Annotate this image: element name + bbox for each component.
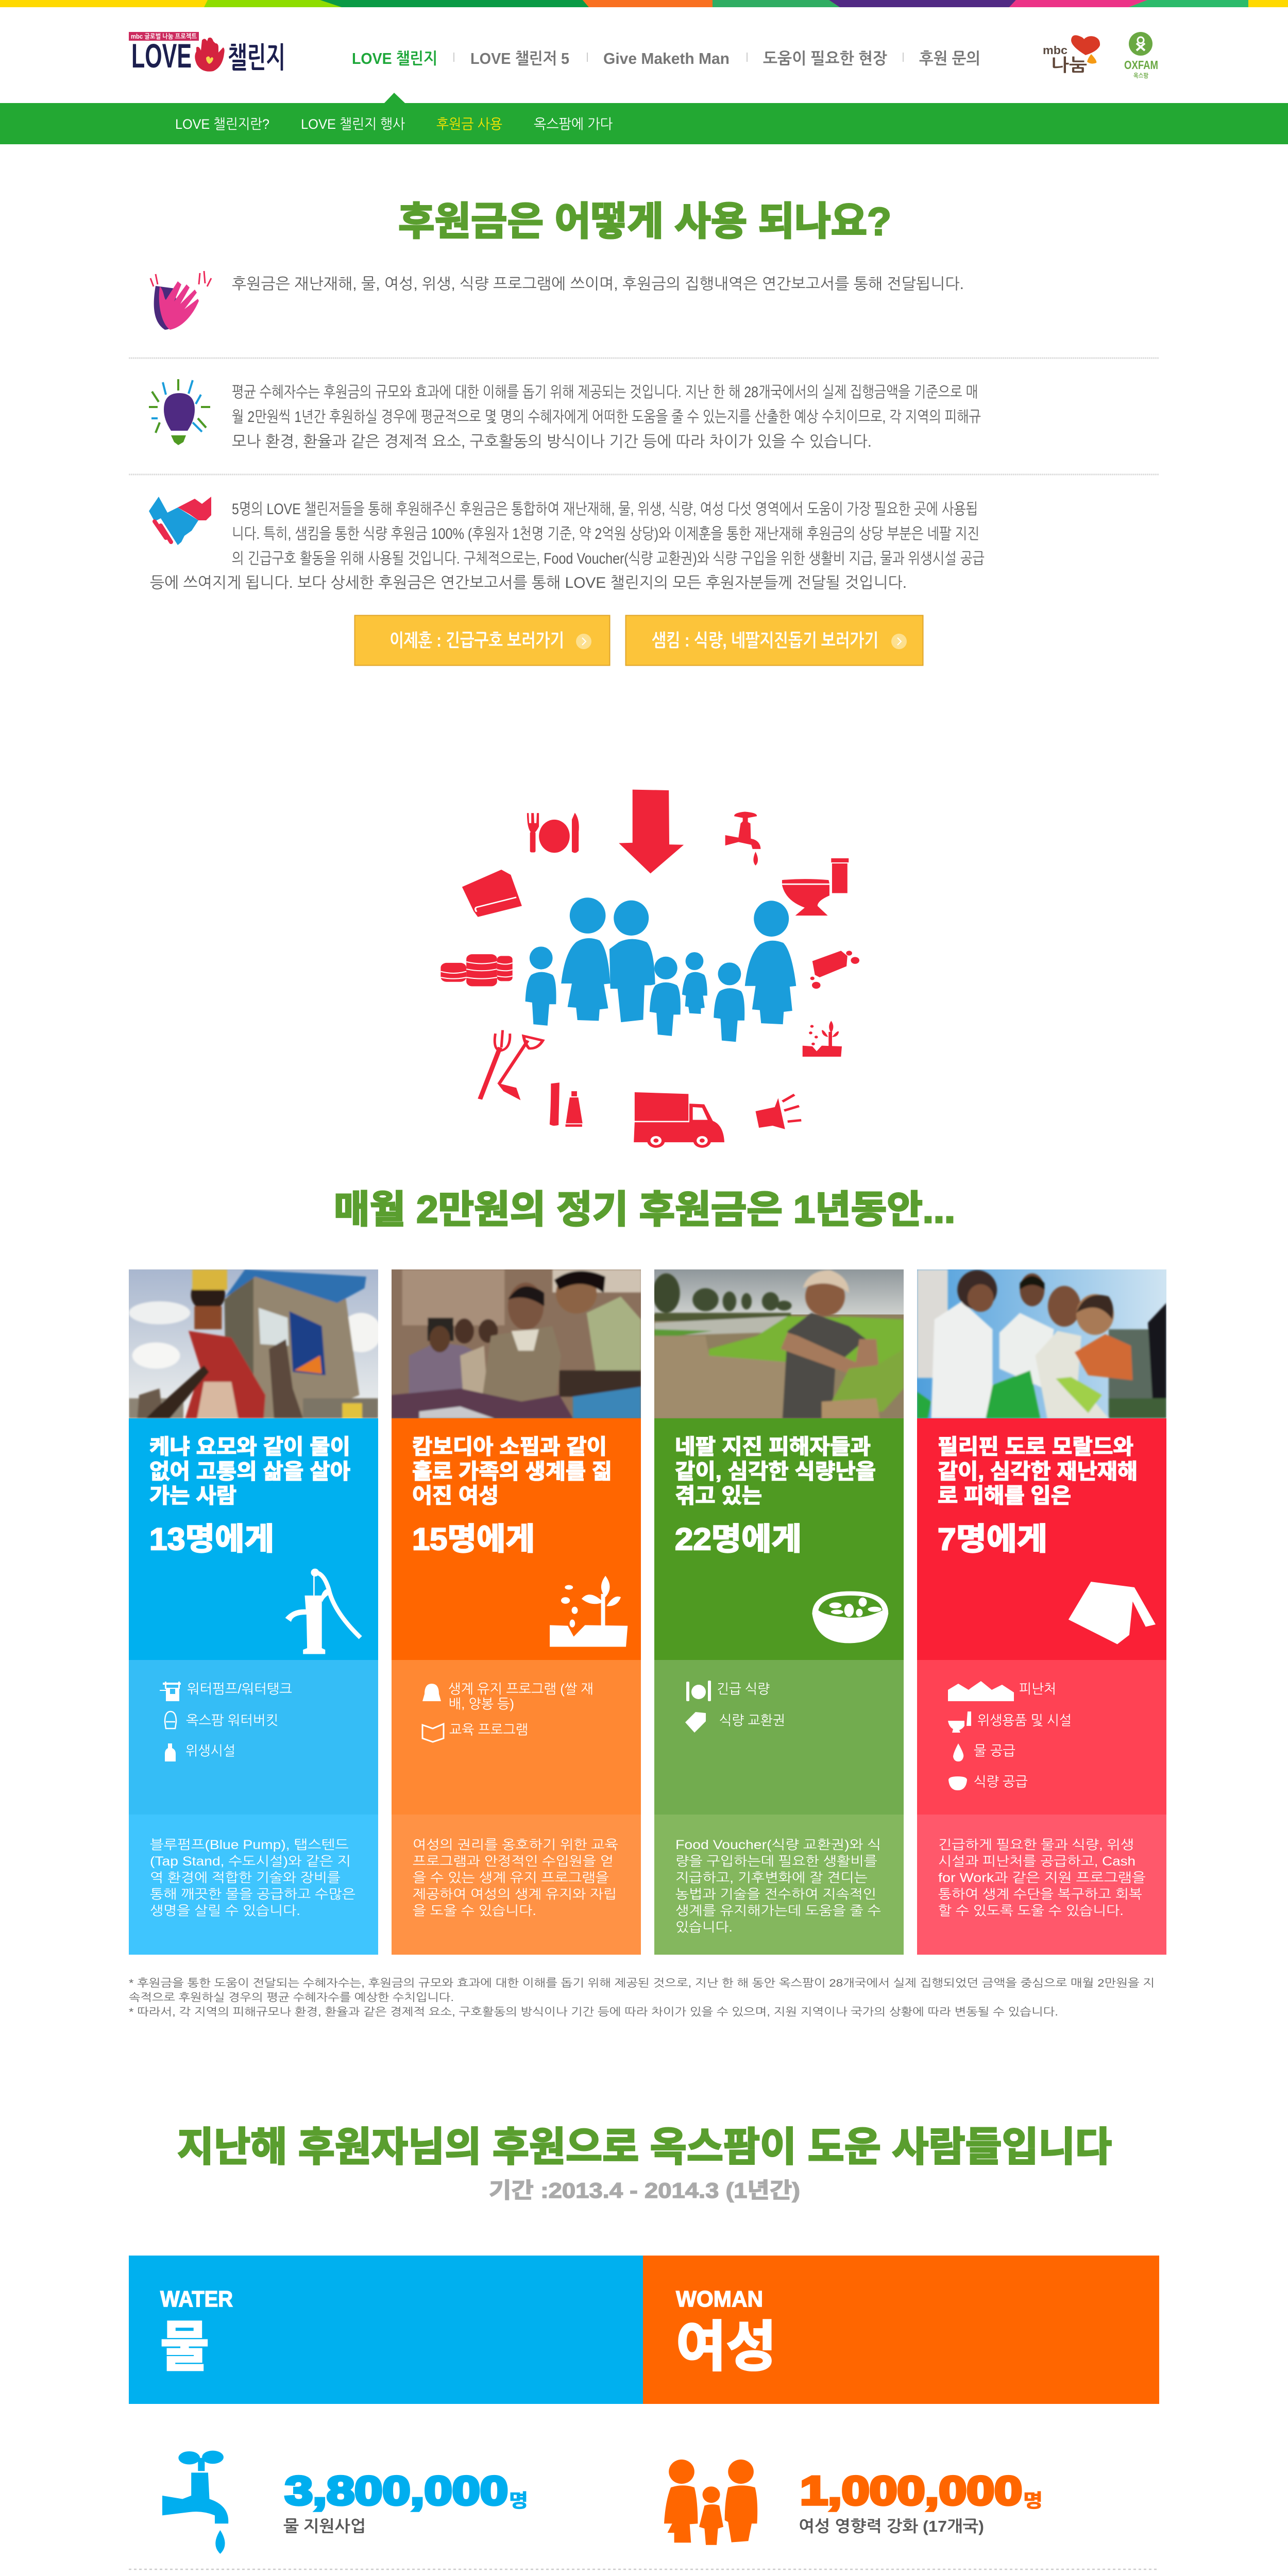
- card heading: 네팔 지진 피해자들과: [675, 1435, 871, 1459]
- beneficiary count: 13명에게: [149, 1522, 274, 1556]
- card 2: Cambodia women: [392, 1269, 641, 1955]
- beneficiary count: 7명에게: [938, 1522, 1047, 1556]
- logo: Oxfam: OXFAM: [1124, 58, 1158, 72]
- description: [150, 1838, 355, 1918]
- card 3: Nepal food: [653, 1269, 904, 1955]
- description: 있습니다.: [675, 1920, 733, 1935]
- card heading: [675, 1435, 876, 1507]
- photo: women group in Cambodia: [392, 1269, 641, 1418]
- card heading: 없어 고통의 삶을 살아: [149, 1460, 350, 1483]
- card heading: 가는 사람: [149, 1484, 236, 1507]
- stat: women's empowerment: 명: [1023, 2490, 1043, 2511]
- logo: LOVE challenge: 챌린지: [228, 41, 285, 74]
- sub navigation bar: LOVE 챌린지란?: [175, 116, 269, 132]
- list: food programmes: [685, 1681, 785, 1733]
- list: livelihood programmes: [422, 1681, 594, 1742]
- photo: water kiosk in Kenya: [129, 1269, 378, 1418]
- list: livelihood programmes: 배, 양봉 등): [449, 1696, 514, 1711]
- main navigation: 도움이 필요한 현장: [763, 49, 887, 67]
- list: emergency programmes: 위생용품 및 시설: [977, 1713, 1072, 1728]
- card 4: Philippines disaster: [917, 1269, 1166, 1955]
- panel: water: WATER: [160, 2286, 233, 2312]
- arrow: donation down: [619, 790, 684, 873]
- main navigation: Give Maketh Man: [603, 49, 730, 67]
- heading: people helped last year: 지난해 후원자님의 후원으로 옥스팜이 도운 사람들입니다: [177, 2124, 1112, 2170]
- text block: intro line: 후원금은 재난재해, 물, 여성, 위생, 식량 프로그램에 쓰이며, 후원금의 집행내역은 연간보고서를 통해 전달됩니다.: [232, 276, 964, 293]
- logo: MBC nanum: 나눔: [1051, 56, 1087, 75]
- icon: open book: [422, 1724, 444, 1742]
- panel: woman: 여성: [676, 2317, 776, 2378]
- text block: how donations are used: 니다. 특히, 샘킴을 통한 식량 후원금 100% (후원자 1천명 기준, 약 2억원 상당)와 이제훈을 통한 재난재해 후원금의 상당 부분은 네팔 지진: [232, 526, 979, 543]
- icon: tap: [162, 2451, 228, 2554]
- description: 통해 깨끗한 물을 공급하고 수많은: [150, 1887, 355, 1902]
- icon: food bowl: [948, 1776, 967, 1790]
- description: 생명을 살릴 수 있습니다.: [150, 1904, 300, 1918]
- stat: women's empowerment: 여성 영향력 강화 (17개국): [799, 2517, 984, 2535]
- description: 프로그램과 안정적인 수입원을 얻: [413, 1854, 614, 1869]
- icon: tap: [725, 811, 760, 866]
- list: water programmes: [160, 1681, 292, 1761]
- description: 을 도울 수 있습니다.: [413, 1904, 536, 1918]
- stat: water projects: 3,800,000: [285, 2468, 508, 2513]
- card heading: [938, 1435, 1138, 1507]
- colour panels: [654, 1418, 904, 1660]
- description: 지급하고, 기후변화에 잘 견디는: [675, 1871, 868, 1885]
- icon: seedling: [803, 1021, 842, 1057]
- button: food and Nepal: [625, 615, 923, 666]
- icon: voucher tag: [685, 1712, 706, 1733]
- logo: LOVE challenge: LOVE: [131, 37, 192, 75]
- panel: woman: WOMAN: [676, 2286, 763, 2312]
- photo: relief distribution in the Philippines: [917, 1269, 1166, 1418]
- list: emergency programmes: 물 공급: [974, 1743, 1015, 1758]
- sub navigation bar: 옥스팜에 가다: [534, 116, 613, 132]
- icon: megaphone: [756, 1095, 801, 1129]
- logo: MBC nanum: mbc: [1043, 44, 1067, 57]
- logo: Oxfam: 옥스팜: [1133, 72, 1149, 79]
- period: 기간 :2013.4 - 2014.3 (1년간): [489, 2178, 800, 2202]
- icon: truck: [634, 1092, 724, 1148]
- logo: LOVE challenge: [129, 32, 285, 75]
- icon: soap: [810, 951, 859, 989]
- list: emergency programmes: [948, 1681, 1072, 1790]
- description: [675, 1838, 881, 1935]
- icon: handshake: [149, 497, 211, 545]
- description: 할 수 있도록 도울 수 있습니다.: [938, 1904, 1124, 1918]
- description: 여성의 권리를 옹호하기 위한 교육: [413, 1838, 618, 1852]
- description: Food Voucher(식량 교환권)와 식: [675, 1838, 881, 1852]
- colour panels: [392, 1418, 641, 1660]
- panel: water: [129, 2256, 643, 2404]
- icon: toilet: [948, 1711, 971, 1733]
- icon: tent: [1069, 1582, 1156, 1644]
- description: (Tap Stand, 수도시설)와 같은 지: [150, 1854, 351, 1869]
- text block: beneficiaries explanation: [232, 384, 981, 450]
- list: food programmes: 식량 교환권: [719, 1713, 785, 1728]
- icon: toilet: [782, 858, 849, 916]
- icon: sewing machine: [422, 1684, 441, 1701]
- icon: plant: [550, 1576, 628, 1647]
- card heading: 어진 여성: [412, 1484, 499, 1507]
- stat: women's empowerment: [664, 2460, 1043, 2545]
- card heading: 케냐 요모와 같이 물이: [149, 1435, 350, 1459]
- icon: family: [664, 2460, 757, 2545]
- footnotes: * 후원금을 통한 도움이 전달되는 수혜자수는, 후원금의 규모와 효과에 대한 이해를 돕기 위해 제공된 것으로, 지난 한 해 동안 옥스팜이 28개국에서 실제 집행되었던 금액을 중심으로 매월 2만원을 지: [129, 1977, 1155, 1989]
- description: 제공하여 여성의 생계 유지와 자립: [413, 1887, 617, 1902]
- icon: wallet: [462, 870, 522, 917]
- description: 블루펌프(Blue Pump), 탭스텐드: [150, 1838, 349, 1852]
- colour panels: [917, 1418, 1166, 1660]
- footnotes: [129, 1977, 1155, 2018]
- text block: how donations are used: 5명의 LOVE 챌린저들을 통해 후원해주신 후원금은 통합하여 재난재해, 물, 위생, 식량, 여성 다섯 영역에서 도움이 가장 필요한 곳에 사용됩: [232, 501, 978, 518]
- icon: bowl of rice: [812, 1591, 888, 1643]
- stat: water projects: 물 지원사업: [283, 2517, 366, 2535]
- logo: MBC nanum: [1043, 35, 1100, 75]
- card 1: Kenya water: [129, 1269, 382, 1955]
- description: [938, 1838, 1146, 1918]
- footnotes: * 따라서, 각 지역의 피해규모나 환경, 환율과 같은 경제적 요소, 구호활동의 방식이나 기간 등에 따라 차이가 있을 수 있으며, 지원 지역이나 국가의 상황에 따라 변동될 수 있습니다.: [129, 2006, 1058, 2018]
- card heading: 홀로 가족의 생계를 짊: [412, 1460, 612, 1483]
- description: 량을 구입하는데 필요한 생활비를: [675, 1854, 877, 1869]
- list: water programmes: 옥스팜 워터버킷: [186, 1713, 278, 1728]
- list: emergency programmes: 피난처: [1019, 1681, 1056, 1697]
- icon: plate and cutlery: [686, 1681, 711, 1701]
- footnotes: 속적으로 후원하실 경우의 평균 수혜자수를 예상한 수치입니다.: [129, 1992, 454, 2004]
- sub navigation bar: 후원금 사용: [436, 116, 502, 132]
- list: water programmes: 워터펌프/워터탱크: [187, 1681, 292, 1697]
- colour panels: [129, 1418, 378, 1660]
- text block: how donations are used: 의 긴급구호 활동을 위해 사용될 것입니다. 구체적으로는, Food Voucher(식량 교환권)와 식량 구입을 위한 생활비 지급, 물과 위생시설 공급: [232, 550, 985, 567]
- icon: farm tools: [480, 1030, 543, 1100]
- stat: women's empowerment: 1,000,000: [800, 2468, 1022, 2513]
- card heading: 캄보디아 소핍과 같이: [412, 1435, 607, 1459]
- photo: boy with rice seedlings: [654, 1269, 904, 1418]
- card heading: 필리핀 도로 모랄드와: [938, 1435, 1133, 1459]
- icon: water drop: [953, 1743, 963, 1761]
- text block: how donations are used: [150, 501, 985, 591]
- text block: beneficiaries explanation: 평균 수혜자수는 후원금의 규모와 효과에 대한 이해를 돕기 위해 제공되는 것입니다. 지난 한 해 28개국에서의 실제 집행금액을 기준으로 매: [232, 384, 978, 401]
- text block: beneficiaries explanation: 월 2만원씩 1년간 후원하실 경우에 평균적으로 몇 명의 수혜자에게 어떠한 도움을 줄 수 있는지를 산출한 예상 수치이므로, 각 지역의 피해규: [232, 409, 981, 426]
- title: 후원금은 어떻게 사용 되나요?: [398, 200, 891, 244]
- text block: beneficiaries explanation: 모나 환경, 환율과 같은 경제적 요소, 구호활동의 방식이나 기간 등에 따라 차이가 있을 수 있습니다.: [232, 433, 872, 450]
- card heading: 같이, 심각한 식량난을: [675, 1460, 876, 1483]
- description: [413, 1838, 618, 1918]
- description: 시설과 피난처를 공급하고, Cash: [938, 1854, 1136, 1869]
- main navigation: 후원 문의: [919, 49, 980, 67]
- logo: LOVE challenge: mbc 글로벌 나눔 프로젝트: [131, 32, 197, 40]
- icon: bucket: [165, 1711, 176, 1728]
- sub navigation bar: LOVE 챌린지 행사: [301, 116, 405, 132]
- icon: shelters: [948, 1681, 1014, 1701]
- main navigation: [352, 49, 980, 67]
- button: emergency: 이제훈 : 긴급구호 보러가기: [389, 631, 564, 651]
- list: water programmes: 위생시설: [185, 1743, 235, 1758]
- description: 생계를 유지해가는데 도움을 줄 수: [675, 1904, 881, 1918]
- description: for Work과 같은 지원 프로그램을: [938, 1871, 1146, 1885]
- list: food programmes: 긴급 식량: [717, 1681, 770, 1697]
- icon: well: [160, 1682, 181, 1701]
- top colour strip: [0, 0, 1288, 7]
- description: 긴급하게 필요한 물과 식량, 위생: [938, 1838, 1134, 1852]
- icon: coins: [440, 954, 513, 986]
- button: food and Nepal: 샘킴 : 식량, 네팔지진돕기 보러가기: [652, 631, 878, 651]
- main navigation: LOVE 챌린지: [352, 49, 437, 67]
- panel: woman: [643, 2256, 1159, 2404]
- heading: monthly donation: 매월 2만원의 정기 후원금은 1년동안...: [334, 1188, 955, 1231]
- button: emergency: [354, 615, 610, 666]
- card heading: 로 피해를 입은: [938, 1484, 1071, 1507]
- list: livelihood programmes: 교육 프로그램: [449, 1722, 528, 1737]
- description: 역 환경에 적합한 기술와 장비를: [150, 1871, 341, 1885]
- beneficiary count: 15명에게: [412, 1522, 535, 1556]
- logo: Oxfam: [1124, 32, 1158, 79]
- list: emergency programmes: 식량 공급: [974, 1774, 1028, 1789]
- illustration: family surrounded by aid icons: [440, 790, 859, 1148]
- main navigation: LOVE 챌린저 5: [470, 49, 569, 67]
- stat: water projects: [162, 2451, 528, 2554]
- list: livelihood programmes: 생계 유지 프로그램 (쌀 재: [448, 1681, 594, 1697]
- panel: water: 물: [160, 2317, 209, 2378]
- card heading: [412, 1435, 612, 1507]
- stat: water projects: 명: [509, 2490, 528, 2511]
- icon: clapping hand: [150, 271, 211, 330]
- description: 통하여 생계 수단을 복구하고 회복: [938, 1887, 1142, 1902]
- description: 을 수 있는 생계 유지 프로그램을: [413, 1871, 609, 1885]
- text block: how donations are used: 등에 쓰여지게 됩니다. 보다 상세한 후원금은 연간보고서를 통해 LOVE 챌린지의 모든 후원자분들께 전달될 것입니다.: [150, 574, 907, 591]
- card heading: [149, 1435, 350, 1507]
- icon: light bulb: [149, 379, 210, 445]
- icon: plate and cutlery: [527, 812, 579, 853]
- card heading: 같이, 심각한 재난재해: [938, 1460, 1138, 1483]
- icon: soap bottle: [165, 1743, 176, 1761]
- beneficiary count: 22명에게: [675, 1522, 802, 1556]
- description: 농법과 기술을 전수하여 지속적인: [675, 1887, 876, 1902]
- card heading: 겪고 있는: [675, 1484, 762, 1507]
- icon: toothbrush and toothpaste: [550, 1082, 583, 1127]
- icon: water pump: [285, 1569, 361, 1654]
- figures: family of seven: [526, 897, 796, 1042]
- sub navigation bar: [0, 93, 1288, 144]
